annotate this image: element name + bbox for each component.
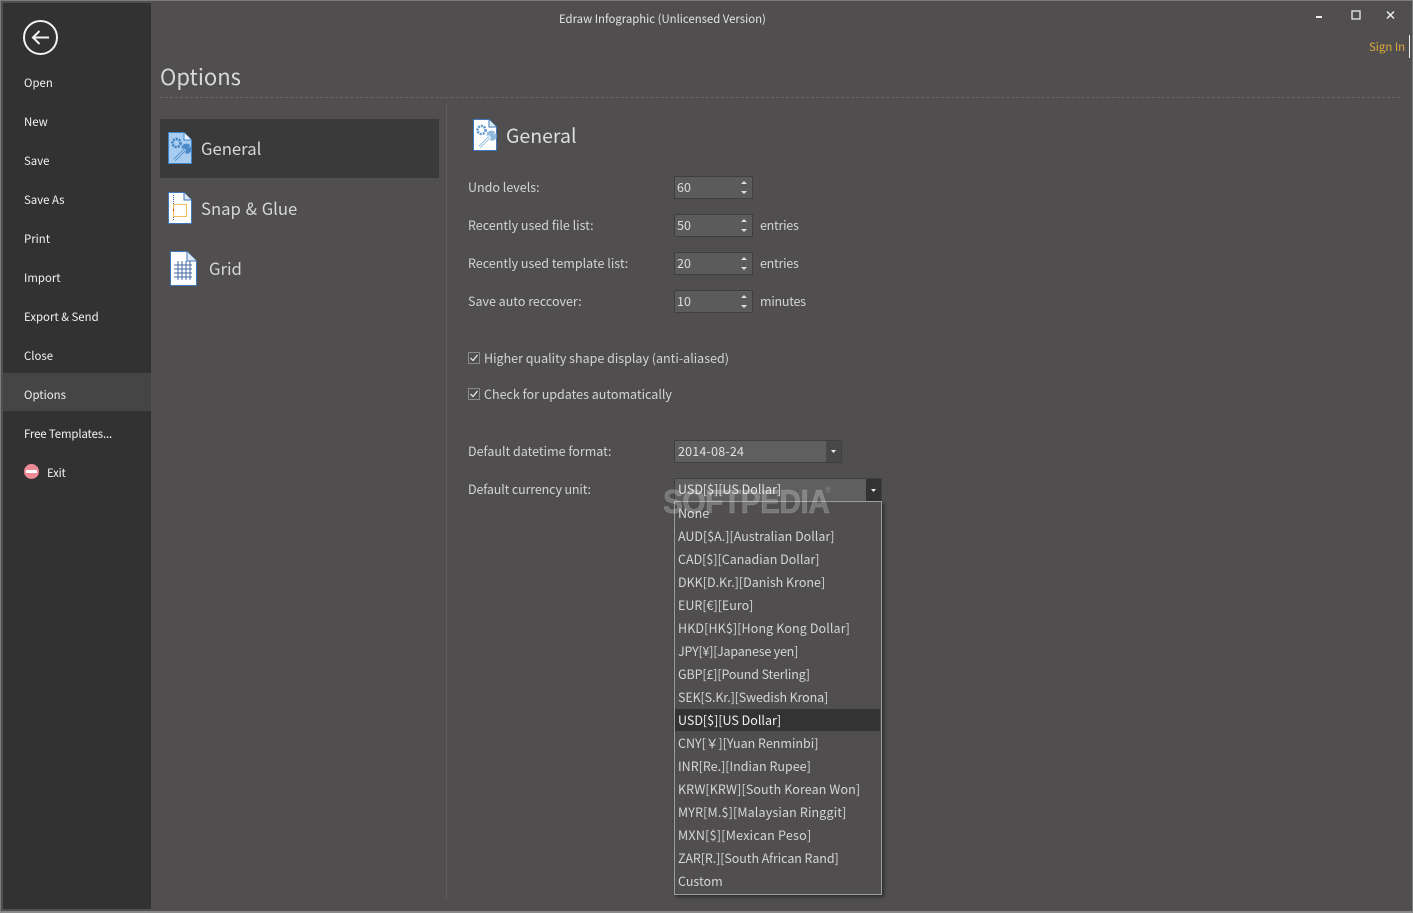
icon: exit bbox=[24, 464, 39, 479]
icon: general section bbox=[473, 119, 497, 151]
window title: Edraw Infographic (Unlicensed Version) bbox=[559, 11, 766, 27]
combo box: currency bbox=[674, 478, 882, 502]
option: CAD: CAD[$][Canadian Dollar] bbox=[678, 549, 820, 568]
label: Grid: Grid bbox=[209, 256, 242, 280]
icon: grid bbox=[170, 251, 197, 286]
spinner: auto recover bbox=[674, 290, 753, 313]
option: INR: INR[Re.][Indian Rupee] bbox=[678, 756, 811, 775]
sign in link: Sign In bbox=[1369, 39, 1405, 55]
menu: Import: Import bbox=[24, 270, 61, 286]
spinner: recent templates bbox=[674, 252, 753, 275]
menu: New: New bbox=[24, 114, 48, 130]
icon: general bbox=[168, 132, 192, 164]
menu: Export & Send: Export & Send bbox=[24, 309, 99, 325]
menu: Free Templates: Free Templates... bbox=[24, 426, 112, 442]
spinner: auto recover: 10 bbox=[677, 291, 691, 310]
menu: Options: Options bbox=[24, 387, 66, 403]
sign in caret bbox=[1409, 35, 1410, 58]
option: GBP: GBP[£][Pound Sterling] bbox=[678, 664, 810, 683]
page heading: Options bbox=[160, 60, 241, 92]
option: KRW: KRW[KRW][South Korean Won] bbox=[678, 779, 860, 798]
menu: Exit: Exit bbox=[47, 465, 66, 481]
icon: back arrow bbox=[23, 20, 58, 55]
option highlight: USD bbox=[675, 709, 880, 731]
option: anti-aliased: Higher quality shape display (anti-aliased) bbox=[484, 348, 729, 367]
watermark: SOFTPEDIA bbox=[663, 484, 829, 521]
dropdown list: currencies bbox=[674, 501, 882, 895]
option: JPY: JPY[¥][Japanese yen] bbox=[678, 641, 798, 660]
menu: Print: Print bbox=[24, 231, 50, 247]
checkbox: anti-aliased bbox=[468, 352, 480, 364]
window controls bbox=[1316, 10, 1394, 20]
label: General: General bbox=[201, 136, 261, 160]
checkbox: updates bbox=[468, 388, 480, 400]
option: updates: Check for updates automatically bbox=[484, 384, 672, 403]
unit: entries: entries bbox=[760, 215, 799, 234]
option: HKD: HKD[HK$][Hong Kong Dollar] bbox=[678, 618, 850, 637]
option: EUR: EUR[€][Euro] bbox=[678, 595, 753, 614]
menu: Close: Close bbox=[24, 348, 53, 364]
unit: entries: entries bbox=[760, 253, 799, 272]
option: None: None bbox=[678, 503, 709, 522]
unit: minutes: minutes bbox=[760, 291, 806, 310]
combo button: date bbox=[826, 441, 841, 462]
option: AUD: AUD[$A.][Australian Dollar] bbox=[678, 526, 834, 545]
spinner: recent templates: 20 bbox=[677, 253, 691, 272]
sidebar selected item: Options highlight bbox=[3, 373, 151, 411]
menu: Open: Open bbox=[24, 75, 53, 91]
left sidebar bbox=[3, 3, 151, 909]
combo value: date: 2014-08-24 bbox=[678, 441, 744, 460]
spinner: recent files: 50 bbox=[677, 215, 691, 234]
combo box: datetime bbox=[674, 440, 842, 463]
label: Snap & Glue: Snap & Glue bbox=[201, 196, 297, 220]
combo button: currency bbox=[866, 479, 881, 502]
label: currency: Default currency unit: bbox=[468, 479, 591, 498]
spinner: undo levels: 60 bbox=[677, 177, 691, 196]
label: auto recover: Save auto reccover: bbox=[468, 291, 582, 310]
spinner: recent files bbox=[674, 214, 753, 237]
selected category background bbox=[160, 119, 439, 178]
watermark: ® bbox=[825, 485, 831, 495]
label: recent templates: Recently used template list: bbox=[468, 253, 628, 272]
spinner: undo levels bbox=[674, 176, 753, 199]
section heading: General: General bbox=[506, 120, 576, 149]
option: CNY: CNY[￥][Yuan Renminbi] bbox=[678, 733, 818, 752]
combo value: currency: USD[$][US Dollar] bbox=[678, 479, 781, 498]
option: DKK: DKK[D.Kr.][Danish Krone] bbox=[678, 572, 825, 591]
option: SEK: SEK[S.Kr.][Swedish Krona] bbox=[678, 687, 828, 706]
option: Custom: Custom bbox=[678, 871, 723, 890]
option: ZAR: ZAR[R.][South African Rand] bbox=[678, 848, 839, 867]
option: USD: USD[$][US Dollar] bbox=[678, 710, 781, 729]
panel: category navigation bbox=[160, 119, 439, 286]
menu: Save: Save bbox=[24, 153, 49, 169]
icon: snap and glue bbox=[168, 192, 192, 224]
label: datetime: Default datetime format: bbox=[468, 441, 612, 460]
option: MYR: MYR[M.$][Malaysian Ringgit] bbox=[678, 802, 847, 821]
label: undo levels: Undo levels: bbox=[468, 177, 540, 196]
menu: Save As: Save As bbox=[24, 192, 65, 208]
option: MXN: MXN[$][Mexican Peso] bbox=[678, 825, 811, 844]
label: recent files: Recently used file list: bbox=[468, 215, 594, 234]
